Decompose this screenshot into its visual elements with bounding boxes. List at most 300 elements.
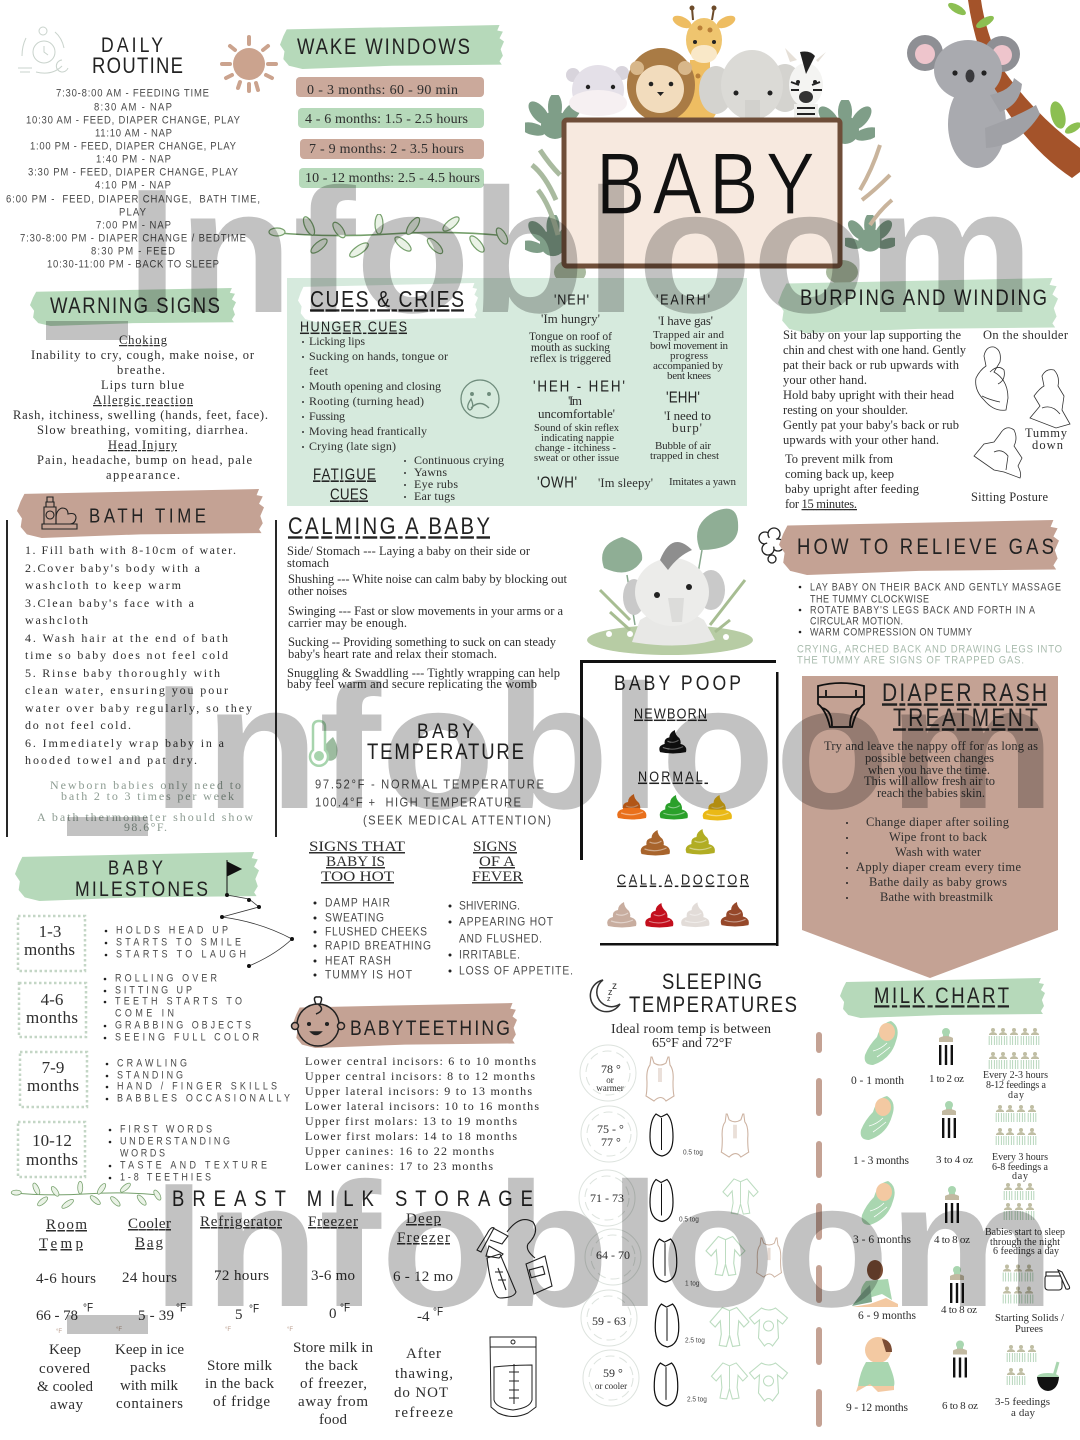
- row: 1-3 months: [853, 1096, 1049, 1182]
- schedule text: PLAY: [119, 207, 146, 219]
- icon: gas cloud: [759, 528, 784, 563]
- hunger cues list: [300, 317, 448, 453]
- storage temperatures: °F: [225, 1327, 231, 1333]
- pill: 0-3 months: [296, 77, 484, 98]
- milestone: 10-12 months: WORDS: [120, 1148, 165, 1160]
- row: 1-3 months: 3 to 4 oz: [936, 1154, 973, 1166]
- newborn: NEWBORN: [634, 704, 707, 722]
- panel: baby temperature: [309, 720, 573, 982]
- milestone: 10-12 months: FIRST WORDS: [120, 1124, 212, 1136]
- icon: sun: [222, 37, 276, 91]
- warning text: Rash, itchiness, swelling (hands, feet, face).: [13, 408, 268, 422]
- panel: warning signs: [13, 288, 268, 482]
- bath notes: [37, 778, 253, 834]
- temperature ranges: 100.4°F + HIGH TEMPERATURE: [315, 795, 521, 810]
- schedule text: 1:40 PM - NAP: [96, 154, 171, 166]
- cry: HEH-HEH: 'Im: [568, 393, 582, 408]
- steps: [25, 543, 252, 767]
- column headers: Bag: [135, 1235, 164, 1251]
- panel: calming a baby: [287, 512, 568, 691]
- signs of a fever: OF A: [479, 854, 515, 870]
- treatment list: Wash with water: [895, 845, 982, 859]
- trapped gas note: THE TUMMY ARE SIGNS OF TRAPPED GAS.: [797, 655, 1024, 667]
- row: 0-1 month: [851, 1021, 1048, 1101]
- cry: HEH-HEH: indicating nappie: [541, 433, 614, 444]
- teething timeline: Upper central incisors: 8 to 12 months: [305, 1069, 535, 1083]
- icon: black bowl: [1037, 1362, 1059, 1391]
- hunger cues list: Moving head frantically: [309, 424, 427, 438]
- leaves around the sign: [519, 93, 900, 284]
- calming methods: Side/ Stomach --- Laying a baby on their side or: [287, 544, 531, 558]
- icon: baby face: [292, 997, 344, 1046]
- milestone: 7-9 months: BABBLES OCCASIONALLY: [117, 1093, 290, 1105]
- teething timeline: Lower canines: 17 to 23 months: [305, 1159, 493, 1173]
- calming methods: carrier may be enough.: [288, 616, 407, 630]
- icon: moon and z: z: [607, 996, 611, 1003]
- heading brush: [30, 288, 236, 326]
- storage temperatures: 5: [235, 1307, 242, 1323]
- warning text: Inability to cry, cough, make noise, or: [31, 348, 255, 362]
- signs too hot: TUMMY IS HOT: [325, 969, 412, 982]
- pill: 7-9 months: 7 - 9 months: 2 - 3.5 hours: [309, 142, 464, 157]
- milestone: 4-6 months: 4-6: [41, 990, 63, 1009]
- column: cooler note: containers: [116, 1396, 183, 1412]
- row: 9-12 months: 9 - 12 months: [846, 1402, 909, 1414]
- column: room temp note: away: [50, 1397, 84, 1413]
- heading: [92, 34, 183, 79]
- teething timeline: Upper lateral incisors: 9 to 13 months: [305, 1084, 532, 1098]
- cry: EAIRH: Trapped air and: [653, 329, 724, 341]
- storage temperatures: °F: [176, 1302, 186, 1315]
- advice: reach the babies skin.: [877, 786, 985, 800]
- storage temperatures: °F: [56, 1329, 62, 1335]
- koala ears: [907, 35, 943, 71]
- panel: wake windows: [280, 25, 504, 188]
- row: 3-6 months: 4 to 8 oz: [934, 1234, 970, 1246]
- row: 59 to 63: 59 - 63: [592, 1314, 626, 1328]
- storage durations: 6 - 12 mo: [393, 1269, 453, 1285]
- heading brush: [840, 978, 1045, 1018]
- steps: 5. Rinse baby thoroughly with: [25, 666, 220, 680]
- storage temperatures: 0: [329, 1306, 336, 1322]
- milestone: 1-3 months: STARTS TO LAUGH: [116, 949, 246, 961]
- icon: shoulder hold sketch: [976, 347, 1008, 410]
- milestone: 7-9 months: CRAWLING: [117, 1058, 187, 1070]
- teething timeline: Upper canines: 16 to 22 months: [305, 1144, 494, 1158]
- row: 71 to 73: 71 - 73: [590, 1191, 624, 1205]
- cry: HEH-HEH: [533, 378, 625, 464]
- hunger cues list: feet: [309, 364, 329, 378]
- steps: 4. Wash hair at the end of bath: [25, 631, 228, 645]
- posture labels: Sitting Posture: [971, 490, 1048, 504]
- heading: [882, 678, 1047, 732]
- column headers: Cooler: [128, 1216, 171, 1232]
- signs too hot: SWEATING: [325, 912, 384, 925]
- koala head: [934, 40, 1002, 100]
- fatigue cues: [313, 453, 504, 504]
- heading brush: [15, 852, 259, 901]
- storage temperatures: °F: [249, 1303, 259, 1316]
- column headers: Refrigerator: [200, 1214, 282, 1230]
- heading: [629, 971, 797, 1018]
- column: deep freezer note: [394, 1346, 453, 1421]
- row: 75 to 77: 75 - °: [597, 1122, 624, 1136]
- row: 0-1 month: Every 2-3 hours: [983, 1070, 1048, 1081]
- steps: time so baby does not feel cold: [25, 648, 228, 662]
- cry: HEH-HEH: change - itchiness -: [535, 443, 616, 454]
- warning text: [13, 333, 268, 482]
- row: 59 to 63: [581, 1290, 788, 1347]
- koala body: [948, 80, 1006, 168]
- row: 59 or cooler: 2.5 tog: [687, 1395, 707, 1404]
- zebra: [785, 48, 826, 120]
- row: 59 to 63: 2.5 tog: [685, 1336, 705, 1345]
- hunger cues list: Sucking on hands, tongue or: [309, 349, 448, 363]
- treatment list: Bathe daily as baby grows: [869, 875, 1007, 889]
- fatigue cues: Ear tugs: [414, 489, 455, 503]
- column headers: Temp: [39, 1236, 83, 1252]
- schedule text: 6:00 PM - FEED, DIAPER CHANGE, BATH TIME,: [6, 194, 260, 206]
- warning text: Choking: [119, 333, 168, 347]
- tips: [799, 582, 1061, 639]
- signs of a fever: LOSS OF APPETITE.: [459, 965, 573, 978]
- cry: HEH-HEH: uncomfortable': [538, 406, 615, 421]
- newborn: [634, 704, 707, 754]
- heading: DAILY: [101, 34, 163, 58]
- tips: CIRCULAR MOTION.: [810, 616, 903, 628]
- fatigue cues: Yawns: [414, 465, 447, 479]
- milestone: 1-3 months: HOLDS HEAD UP: [116, 925, 228, 937]
- cry: EHH: burp': [672, 420, 702, 435]
- heading on white brush: [298, 283, 478, 322]
- cry: EHH: [650, 389, 719, 462]
- ears: [623, 579, 645, 615]
- row: 9-12 months: a day: [1011, 1407, 1036, 1419]
- heading: BABYTEETHING: [350, 1017, 510, 1041]
- heading: BATH TIME: [89, 504, 206, 527]
- row: 6-9 months: 6 - 9 months: [858, 1310, 917, 1322]
- heading: BURPING AND WINDING: [800, 287, 1047, 311]
- steps: washcloth to keep warm: [25, 578, 182, 592]
- fatigue cues: Eye rubs: [414, 477, 458, 491]
- heading: TEMPERATURES: [629, 994, 797, 1018]
- panel: bath time: [7, 489, 276, 837]
- ideal temperature note: 65°F and 72°F: [652, 1036, 732, 1051]
- main title: BABY: [596, 135, 815, 233]
- row: 6-9 months: 4 to 8 oz: [941, 1304, 977, 1316]
- instructions: upwards with your other hand.: [783, 433, 939, 447]
- row: 3-6 months: [853, 1181, 1065, 1257]
- fatigue cues: CUES: [330, 486, 368, 504]
- tips: LAY BABY ON THEIR BACK AND GENTLY MASSAGE: [810, 582, 1061, 594]
- heading: BABY: [108, 856, 163, 879]
- panel: sleeping temperatures: [579, 971, 797, 1406]
- hunger cues list: Licking lips: [309, 334, 365, 348]
- column: cooler note: Keep in ice: [115, 1342, 184, 1358]
- row: 78 or warmer: or: [606, 1075, 614, 1085]
- row: 9-12 months: 6 to 8 oz: [942, 1400, 978, 1412]
- steps: hooded towel and pat dry.: [25, 753, 197, 767]
- row: 3-6 months: 3 - 6 months: [853, 1234, 912, 1246]
- row: 64 to 70: 64 - 70: [596, 1248, 630, 1262]
- instructions: Gently pat your baby's back or rub: [783, 418, 959, 432]
- panel: baby poop: [580, 660, 778, 946]
- tips: WARM COMPRESSION ON TUMMY: [810, 627, 972, 639]
- pill: 0-3 months: 0 - 3 months: 60 - 90 min: [307, 83, 458, 98]
- watermark: Infobloom: Infobloom: [126, 152, 1034, 350]
- treatment list: [846, 815, 1021, 904]
- milestone: 10-12 months: [18, 1122, 267, 1184]
- temperature ranges: [315, 777, 551, 828]
- heading: TREATMENT: [893, 703, 1038, 732]
- column: freezer note: the back: [305, 1358, 358, 1374]
- bath notes: Newborn babies only need to: [50, 778, 241, 792]
- bath notes: A bath thermometer should show: [37, 810, 253, 824]
- icon: moon and z: z: [612, 981, 617, 992]
- cry: EHH: 'I need to: [664, 408, 711, 423]
- calming methods: Swinging --- Fast or slow movements in your arms or a: [288, 604, 563, 618]
- cry: EAIRH: 'EAIRH': [656, 290, 710, 308]
- column: cooler note: packs: [130, 1360, 166, 1376]
- column: room temp note: [37, 1342, 94, 1413]
- row: 1-3 months: 6-8 feedings a: [992, 1162, 1049, 1173]
- schedule text: 1:00 PM - FEED, DIAPER CHANGE, PLAY: [30, 141, 236, 153]
- heading: [75, 856, 208, 902]
- panel: burping and winding: [778, 278, 1070, 511]
- icon: breast pump: [477, 1220, 552, 1298]
- banner: [802, 676, 1058, 978]
- column: deep freezer note: thawing,: [395, 1366, 453, 1382]
- icon: daily cycle clock: [18, 27, 68, 73]
- steps: 3.Clean baby's face with a: [25, 596, 195, 610]
- schedule text: 7:30-8:00 AM - FEEDING TIME: [56, 88, 209, 100]
- warning text: Pain, headache, bump on head, pale: [37, 453, 252, 467]
- column headers: Freezer: [308, 1214, 358, 1230]
- schedule text: 8:30 AM - NAP: [94, 102, 172, 114]
- cry: EHH: trapped in chest: [650, 450, 719, 462]
- milestone: 4-6 months: GRABBING OBJECTS: [115, 1020, 251, 1032]
- signs too hot: RAPID BREATHING: [325, 940, 431, 953]
- column headers: Room: [46, 1217, 87, 1233]
- schedule text: 4:10 PM - NAP: [95, 180, 171, 192]
- row: 75 to 77: 0.5 tog: [683, 1148, 703, 1157]
- warning text: Slow breathing, vomiting, diarrhea.: [37, 423, 248, 437]
- row: 78 or warmer: warmer: [596, 1083, 624, 1093]
- side rules: [7, 520, 276, 837]
- icon: puree jar: [1045, 1270, 1070, 1290]
- head: [635, 558, 709, 626]
- storage temperatures: °F: [340, 1302, 350, 1315]
- column: freezer note: Store milk in: [293, 1340, 374, 1356]
- posture labels: [971, 328, 1069, 504]
- treatment list: Apply diaper cream every time: [856, 860, 1021, 874]
- instructions: chin and chest with one hand. Gently: [783, 343, 967, 357]
- teething timeline: [305, 1054, 539, 1173]
- heading brush: [779, 520, 1059, 575]
- row: 0-1 month: 1 to 2 oz: [929, 1073, 964, 1085]
- cry: EHH: 'EHH': [666, 389, 700, 407]
- heading brush: [293, 1003, 517, 1048]
- signs too hot: SIGNS THAT: [309, 839, 405, 855]
- row: 78 or warmer: [580, 1045, 674, 1101]
- instructions: for 15 minutes.: [785, 497, 857, 511]
- panel: daily routine: [6, 27, 260, 271]
- milestone: 10-12 months: 10-12: [32, 1131, 72, 1150]
- advice: possible between changes: [865, 751, 994, 765]
- instructions: Sit baby on your lap supporting the: [783, 328, 961, 342]
- frame: [580, 660, 778, 946]
- instructions: resting on your shoulder.: [783, 403, 908, 417]
- steps: 1. Fill bath with 8-10cm of water.: [25, 543, 236, 557]
- signs too hot: DAMP HAIR: [325, 897, 390, 910]
- cry: NEH: 'Im hungry': [541, 311, 600, 326]
- row: 3-6 months: 6 feedings a day: [993, 1246, 1059, 1257]
- calming methods: baby feel warm and secure replicating the womb: [287, 677, 537, 691]
- row: 0-1 month: 8-12 feedings a: [986, 1080, 1047, 1091]
- heading: HOW TO RELIEVE GAS: [797, 536, 1054, 560]
- schedule text: 3:30 PM - FEED, DIAPER CHANGE, PLAY: [28, 167, 238, 179]
- schedule text: 10:30 AM - FEED, DIAPER CHANGE, PLAY: [26, 115, 240, 127]
- big leaves: [602, 509, 738, 572]
- column: room temp note: Keep: [49, 1342, 81, 1358]
- advice: when you have the time.: [868, 763, 990, 777]
- panel background: [287, 278, 747, 506]
- illustration: koala on branch: [907, 0, 1080, 178]
- row: 3-6 months: through the night: [990, 1237, 1060, 1248]
- column: fridge note: Store milk: [207, 1358, 272, 1374]
- icon: bath toys: [42, 497, 77, 529]
- signs of a fever: SIGNS: [473, 839, 517, 855]
- schedule text: 11:10 AM - NAP: [95, 128, 172, 140]
- warning text: Allergic reaction: [93, 393, 194, 407]
- signs of a fever: IRRITABLE.: [459, 949, 520, 962]
- milestone: 1-3 months: [18, 916, 246, 971]
- cry: HEH-HEH: sweat or other issue: [534, 453, 619, 464]
- row: 0-1 month: day: [1008, 1090, 1024, 1101]
- wooden sign: [564, 120, 840, 266]
- signs too hot: FLUSHED CHEEKS: [325, 926, 427, 939]
- cry: EHH: Bubble of air: [655, 440, 711, 452]
- watermark: Infobloom: Infobloom: [153, 648, 1055, 846]
- instructions: baby upright after feeding: [785, 482, 920, 496]
- storage durations: [36, 1268, 453, 1287]
- heading: MILESTONES: [75, 878, 208, 902]
- panel: milk chart: [816, 978, 1070, 1427]
- heading: ROUTINE: [92, 55, 183, 79]
- milestone: 10-12 months: months: [26, 1150, 78, 1169]
- bath notes: bath 2 to 3 times per week: [61, 789, 234, 803]
- calming methods: Snuggling & Swaddling --- Tightly wrapping can help: [287, 666, 560, 680]
- warning text: breathe.: [117, 363, 165, 377]
- cry: EAIRH: [650, 290, 728, 382]
- advice: Try and leave the nappy off for as long as: [824, 739, 1038, 753]
- icon: moon and z: z: [608, 987, 613, 997]
- milestone: 1-3 months: STARTS TO SMILE: [116, 937, 241, 949]
- instructions: your other hand.: [783, 373, 867, 387]
- signs of a fever: AND FLUSHED.: [459, 933, 542, 946]
- panel: baby milestones: [15, 852, 294, 1184]
- column: freezer note: food: [319, 1412, 348, 1428]
- heading: SLEEPING: [662, 971, 762, 995]
- temperature ranges: (SEEK MEDICAL ATTENTION): [363, 813, 551, 828]
- heading brush: [17, 489, 264, 538]
- storage durations: 3-6 mo: [311, 1268, 355, 1284]
- ideal temperature note: [611, 1022, 771, 1051]
- vine decoration: [11, 1181, 162, 1210]
- schedule text: 10:30-11:00 PM - BACK TO SLEEP: [47, 259, 219, 271]
- milestone: 4-6 months: months: [26, 1008, 78, 1027]
- normal: NORMAL: [638, 767, 708, 785]
- column: freezer note: away from: [298, 1394, 368, 1410]
- cry: NEH: Tongue on roof of: [529, 331, 612, 343]
- storage durations: 72 hours: [214, 1268, 269, 1284]
- watermark: Infobloom: Infobloom: [153, 1146, 1055, 1344]
- storage temperatures: [36, 1302, 443, 1335]
- column: fridge note: [205, 1358, 274, 1410]
- calming methods: stomach: [287, 556, 330, 570]
- signs too hot: TOO HOT: [321, 869, 394, 885]
- row: 9-12 months: 3-5 feedings: [995, 1396, 1050, 1408]
- milestone: 7-9 months: [20, 1052, 290, 1107]
- row: 59 or cooler: 59 °: [603, 1366, 623, 1380]
- row: 71 to 73: [579, 1170, 758, 1226]
- heading brush: [778, 278, 1058, 333]
- icon: moon and z: [590, 980, 620, 1012]
- vine divider: [269, 214, 510, 260]
- column: fridge note: in the back: [205, 1376, 274, 1392]
- heading: TEMPERATURE: [367, 741, 524, 765]
- steps: do not feel cold.: [25, 718, 131, 732]
- instructions: [783, 328, 967, 511]
- cry: EAIRH: bent knees: [667, 370, 711, 382]
- heading: BREAST MILK STORAGE: [172, 1188, 533, 1212]
- heading: CALMING A BABY: [288, 512, 490, 540]
- column: fridge note: of fridge: [213, 1394, 270, 1410]
- cry: OWH: 'OWH': [537, 474, 577, 492]
- heading: WARNING SIGNS: [50, 295, 220, 319]
- pill: 4-6 months: 4 - 6 months: 1.5 - 2.5 hours: [305, 112, 468, 127]
- teething timeline: Lower lateral incisors: 10 to 16 months: [305, 1099, 539, 1113]
- milestone: 4-6 months: [19, 973, 259, 1044]
- branch: [968, 0, 1080, 178]
- column headers: Deep: [406, 1211, 441, 1227]
- posture labels: On the shoulder: [983, 328, 1069, 342]
- calming methods: Sucking -- Providing something to suck on can steady: [288, 635, 557, 649]
- row: 1-3 months: day: [1012, 1171, 1028, 1182]
- warning text: appearance.: [106, 468, 180, 482]
- milestone: 4-6 months: TEETH STARTS TO: [115, 996, 242, 1008]
- storage temperatures: -4: [417, 1309, 430, 1325]
- pill: 10-12 months: 10 - 12 months: 2.5 - 4.5 hours: [305, 171, 480, 186]
- heading: BABY POOP: [614, 672, 741, 696]
- steps: 2.Cover baby's body with a: [25, 561, 201, 575]
- panel: baby teething: [292, 997, 539, 1173]
- row: 1-3 months: 1 - 3 months: [853, 1155, 910, 1167]
- storage temperatures: 66 - 78: [36, 1308, 78, 1324]
- icon: diaper: [818, 683, 864, 727]
- row: 6-9 months: [852, 1260, 1070, 1335]
- steps: washcloth: [25, 613, 88, 627]
- calming methods: baby's heart rate and relax their stomach.: [288, 647, 497, 661]
- instructions: Hold baby upright with their head: [783, 388, 955, 402]
- milestone: 10-12 months: UNDERSTANDING: [120, 1136, 230, 1148]
- call a doctor: [607, 870, 749, 928]
- row: 59 or cooler: [583, 1350, 788, 1406]
- milestone: 7-9 months: HAND / FINGER SKILLS: [117, 1081, 277, 1093]
- posture labels: down: [1032, 438, 1064, 452]
- milestone: 4-6 months: COME IN: [115, 1008, 174, 1020]
- panel: breast milk storage: [11, 1181, 552, 1428]
